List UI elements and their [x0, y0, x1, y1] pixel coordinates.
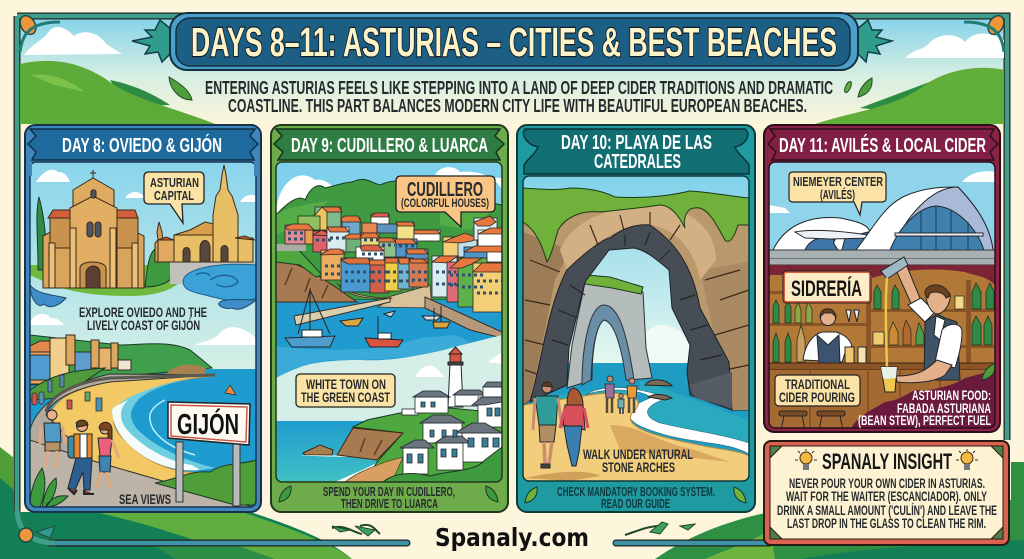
- lighthouse: [448, 347, 463, 407]
- callout: white town: [296, 374, 395, 407]
- sign: Sidrería: [783, 271, 871, 303]
- rocky shore: [276, 262, 357, 302]
- cathedral: [155, 165, 255, 262]
- brown cliffs: [337, 428, 403, 460]
- footer text day 9: SPEND YOUR DAY IN CUDILLERO,: [323, 485, 455, 499]
- footer leaves day 9: [279, 486, 498, 502]
- house windows: [288, 233, 502, 293]
- promenade: [30, 374, 194, 468]
- scene: Playa de las Catedrales: [523, 176, 749, 481]
- callout: Niemeyer: [789, 172, 886, 215]
- glass low: [881, 367, 897, 392]
- church: [43, 170, 144, 288]
- stools: [779, 411, 845, 430]
- cider stream: [886, 278, 887, 368]
- footer text day 10: READ OUR GUIDE: [601, 497, 670, 511]
- harbour water: [276, 300, 502, 380]
- bottom right hills: [655, 462, 1024, 559]
- tan rock: [523, 200, 749, 410]
- piers: [294, 298, 390, 325]
- right bartender: [896, 264, 962, 383]
- text: walk under arches: WALK UNDER NATURAL: [583, 447, 693, 462]
- bar wall: [769, 265, 995, 430]
- panel: day 10: [517, 125, 755, 512]
- panel: day 11: [764, 125, 1000, 432]
- text: explore: LIVELY COAST OF GIJÓN: [87, 316, 200, 333]
- sea: [205, 369, 256, 375]
- footer text day 9: [323, 485, 455, 511]
- bottom left hills: [0, 447, 352, 559]
- scene: Avilés and cider: [769, 162, 996, 430]
- day 9 header: [274, 129, 504, 160]
- white town: [400, 382, 502, 474]
- text: sea views: SEA VIEWS: [119, 491, 171, 507]
- boats: [285, 288, 450, 347]
- walker 1: [40, 410, 66, 468]
- small figures: [32, 375, 236, 411]
- callout: Asturian capital: ASTURIAN: [150, 175, 199, 190]
- Gijón sign: [168, 402, 250, 506]
- insight body text: [777, 476, 997, 531]
- dark arch: [530, 225, 732, 410]
- walker 3: [96, 422, 119, 488]
- callout: Cudillero: [396, 176, 495, 227]
- panel: day 8: [25, 125, 261, 512]
- food text: [858, 388, 991, 428]
- insight heading: SPANALY INSIGHT: [822, 449, 952, 474]
- text: walk under arches: STONE ARCHES: [602, 460, 675, 475]
- left bartender: [803, 309, 866, 364]
- day 10 header: DAY 10: PLAYA DE LAS: [561, 132, 712, 154]
- lower clouds: [415, 352, 502, 377]
- callout: Cudillero: (COLORFUL HOUSES): [401, 196, 489, 210]
- decorative leaves: [169, 77, 872, 536]
- sand: [523, 393, 749, 481]
- shaker: [881, 257, 908, 279]
- ground and road: [337, 283, 432, 308]
- text: walk under arches: [583, 447, 693, 475]
- footer leaves day 10: [525, 487, 746, 503]
- callout: Niemeyer: NIEMEYER CENTER: [793, 174, 883, 189]
- rock islet: [303, 445, 333, 455]
- right hill: [815, 68, 1004, 124]
- callout: traditional cider pouring: TRADITIONAL: [785, 377, 850, 392]
- panel: Spanaly insight: [764, 441, 1009, 545]
- grass: [523, 188, 749, 262]
- icon: light bulb left: [795, 449, 817, 470]
- callout: traditional cider pouring: CIDER POURING: [779, 390, 855, 405]
- bottom frame line: [17, 510, 770, 543]
- Gijón sign: GIJÓN: [177, 407, 239, 441]
- distant arch: [567, 282, 652, 388]
- intro text: [205, 78, 833, 116]
- counter: [769, 363, 995, 370]
- brand: Spanaly.com: Spanaly.com: [435, 523, 589, 552]
- callout: Asturian capital: CAPITAL: [154, 188, 194, 203]
- couple walking: [533, 382, 588, 468]
- green hills: [276, 179, 502, 300]
- rocks in water: [645, 380, 672, 400]
- green cliff: [353, 408, 502, 482]
- footer text day 10: CHECK MANDATORY BOOKING SYSTEM.: [557, 485, 715, 499]
- text: explore: EXPLORE OVIEDO AND THE: [79, 304, 207, 320]
- callout: traditional cider pouring: [775, 375, 860, 406]
- scene: Oviedo and Gijón: [30, 162, 260, 510]
- icon: light bulb right: [956, 449, 978, 470]
- callout: Niemeyer: (AVILÉS): [820, 187, 855, 202]
- distant family: [605, 376, 637, 414]
- bush: [155, 460, 256, 505]
- title banner: [132, 13, 892, 70]
- sign: Sidrería: SIDRERÍA: [791, 276, 862, 301]
- beach: [50, 376, 215, 490]
- callout: white town: WHITE TOWN ON: [306, 376, 386, 392]
- scene: Cudillero and Luarca: [276, 162, 502, 482]
- Niemeyer center: [773, 187, 993, 250]
- callout: Cudillero: CUDILLERO: [407, 179, 483, 201]
- day 10 header: [523, 129, 749, 174]
- leaves: [30, 468, 68, 507]
- bottles: [773, 283, 994, 362]
- walker 2: [68, 420, 94, 494]
- lower sky: [276, 335, 502, 422]
- day 8 header: DAY 8: OVIEDO & GIJÓN: [62, 133, 222, 157]
- lower sea: [276, 421, 386, 481]
- water foam: [558, 380, 748, 442]
- footer text day 10: [557, 485, 715, 511]
- day 11 header: [768, 129, 998, 160]
- surf: [300, 455, 380, 482]
- callout: white town: THE GREEN COAST: [301, 389, 390, 405]
- Gijón buildings: [30, 335, 131, 384]
- text: explore: [79, 304, 207, 333]
- houses: [285, 207, 502, 312]
- footer text day 9: THEN DRIVE TO LUARCA: [341, 497, 438, 511]
- callout: Asturian capital: [144, 172, 204, 223]
- day 10 header: CATEDRALES: [594, 151, 681, 173]
- day 8 header: [28, 129, 258, 160]
- food corner: [850, 370, 995, 430]
- clouds top: [24, 27, 1004, 58]
- far hills: [30, 335, 212, 385]
- lower sky clouds: [30, 314, 256, 345]
- panel: day 9: [271, 125, 508, 512]
- day 9 header: DAY 9: CUDILLERO & LUARCA: [291, 135, 488, 157]
- left hill: [20, 61, 215, 124]
